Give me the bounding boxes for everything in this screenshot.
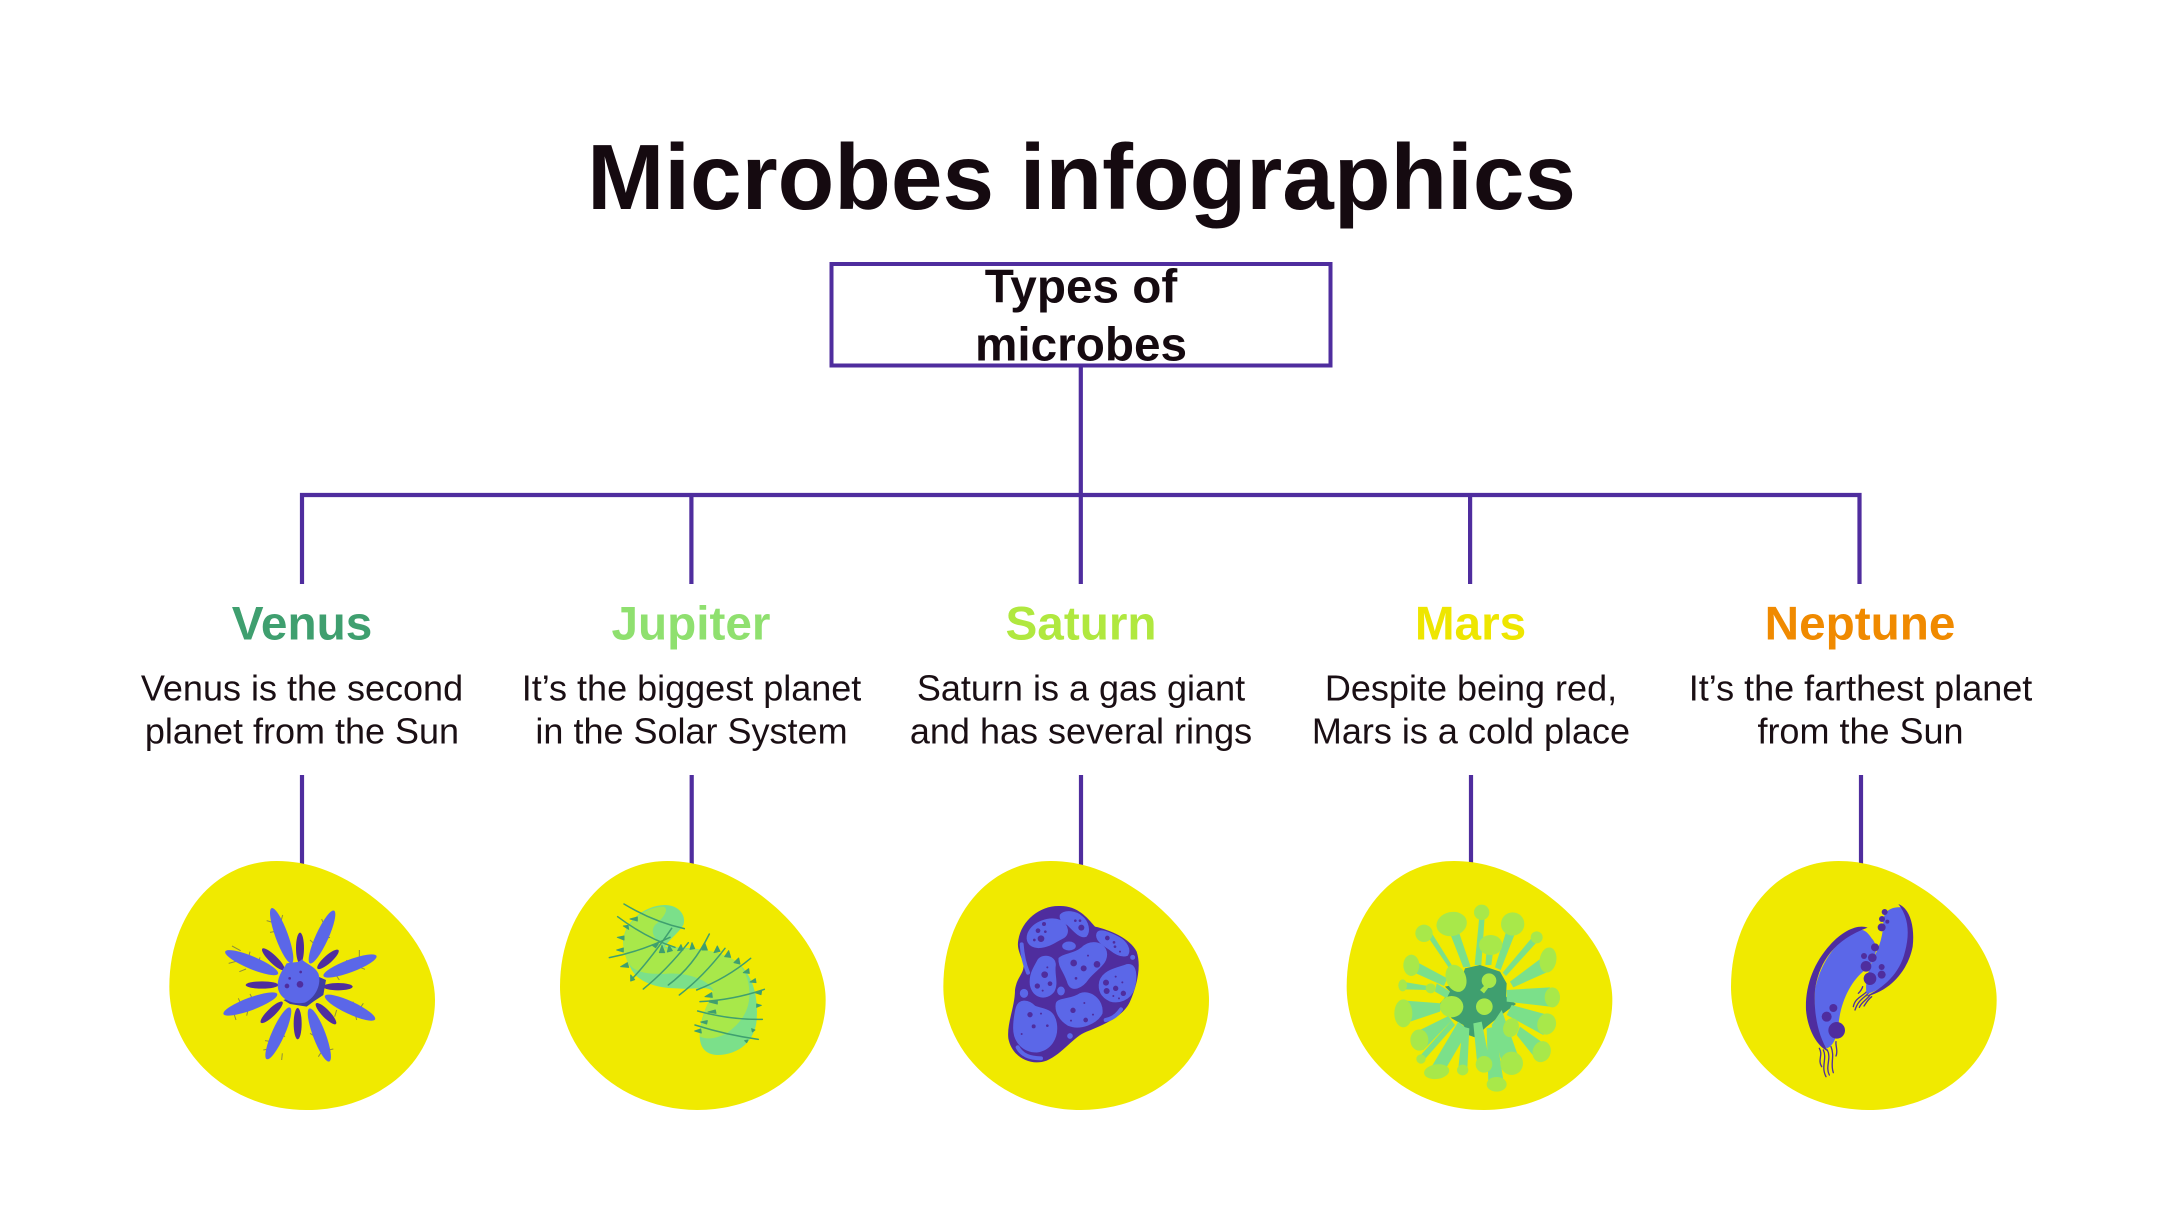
icon: Venus star-shaped microbe xyxy=(169,861,435,1110)
icon: Jupiter worm-shaped microbe xyxy=(560,861,826,1110)
Neptune description: from the Sun xyxy=(1757,710,1964,752)
Neptune description: It’s the farthest planet xyxy=(1689,668,2032,708)
Neptune name: Neptune xyxy=(1765,598,1955,650)
column: Neptune xyxy=(1689,598,2032,1110)
tree connectors xyxy=(302,365,1861,866)
Saturn description: and has several rings xyxy=(910,710,1252,752)
root box: types of microbes: microbes xyxy=(975,318,1187,372)
root box: types of microbes xyxy=(832,260,1330,372)
Mars description: Mars is a cold place xyxy=(1312,710,1630,752)
Venus description: Venus is the second xyxy=(141,668,463,708)
icon: Mars virus microbe xyxy=(1347,861,1612,1110)
column: Mars xyxy=(1312,598,1630,1110)
icon: Saturn amoeba microbe xyxy=(943,861,1209,1110)
root box: types of microbes: Types of xyxy=(985,260,1177,314)
column: Saturn xyxy=(910,598,1252,1110)
Saturn name: Saturn xyxy=(1005,598,1157,650)
Jupiter description: in the Solar System xyxy=(535,710,848,752)
Mars name: Mars xyxy=(1415,598,1526,650)
column: Venus xyxy=(141,598,463,1110)
icon: Neptune bacteria microbe xyxy=(1731,861,1997,1110)
Mars description: Despite being red, xyxy=(1325,668,1617,708)
title: Microbes infographics xyxy=(587,125,1576,229)
column: Jupiter xyxy=(522,598,861,1110)
Saturn description: Saturn is a gas giant xyxy=(917,668,1245,708)
Venus name: Venus xyxy=(232,598,372,650)
Venus description: planet from the Sun xyxy=(145,710,459,752)
Jupiter description: It’s the biggest planet xyxy=(522,668,861,708)
Jupiter name: Jupiter xyxy=(612,598,770,650)
